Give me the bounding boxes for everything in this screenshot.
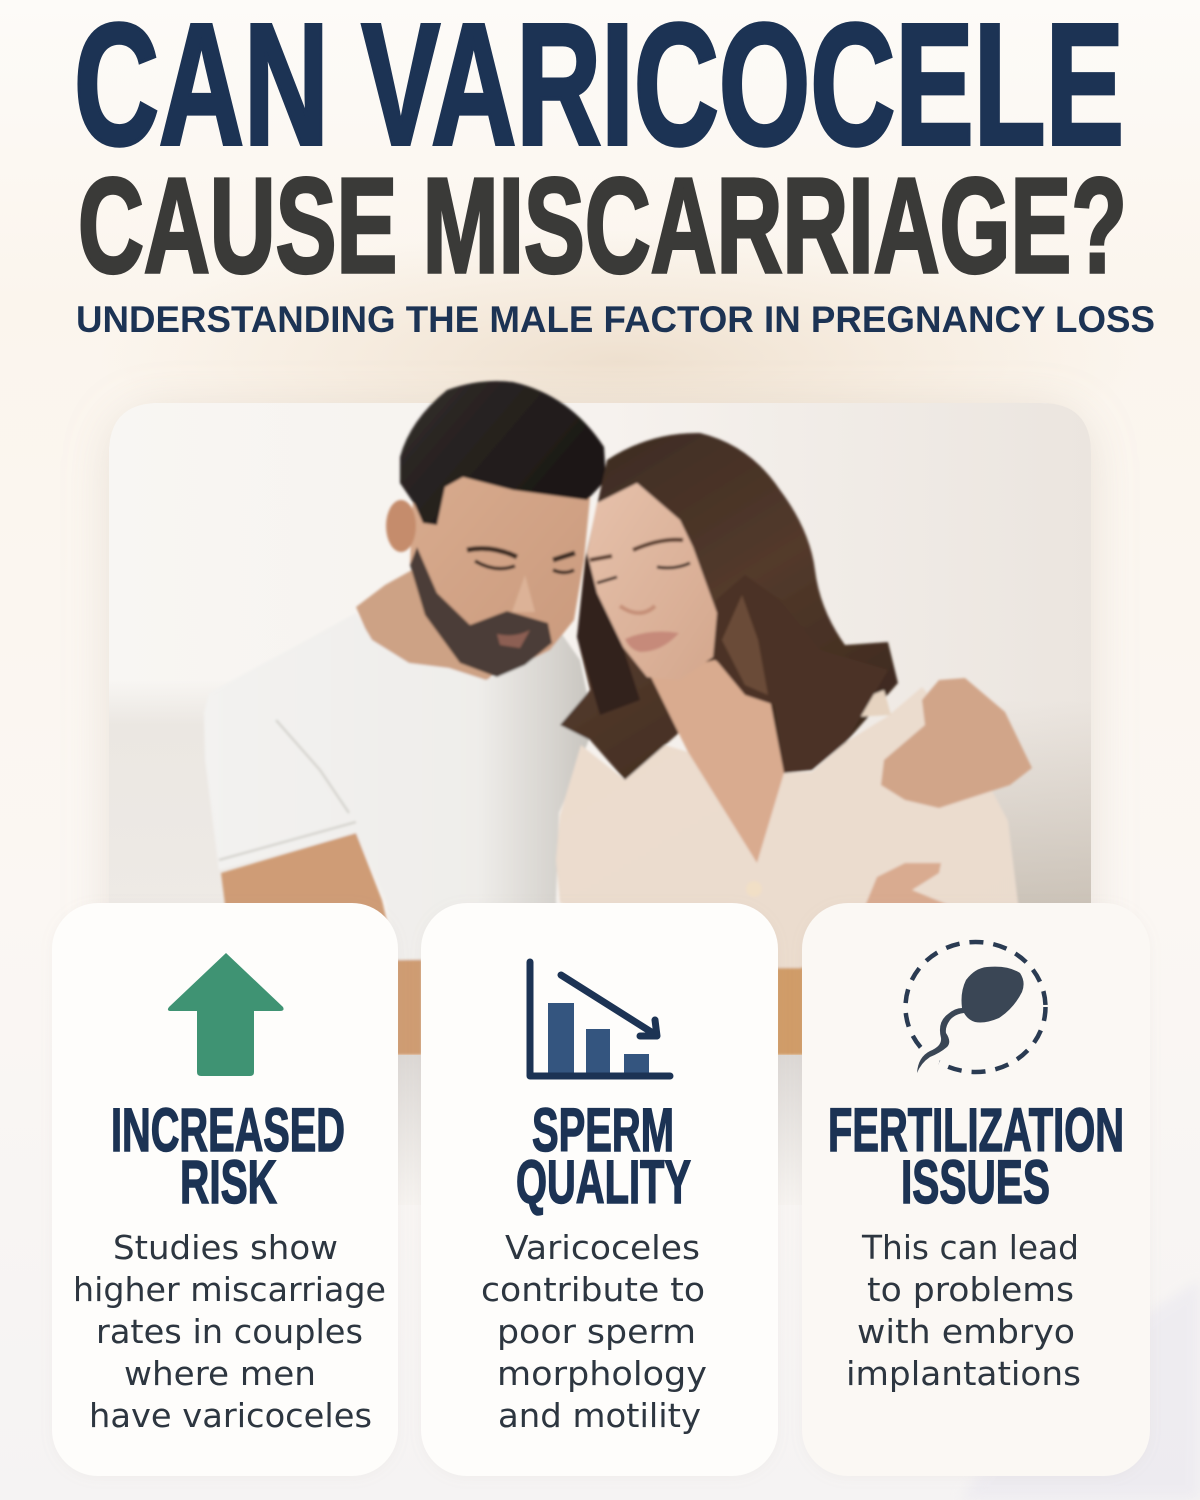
gaps below photo	[398, 1055, 802, 1205]
woman's lips	[625, 631, 679, 652]
woman's features	[590, 540, 683, 560]
text: increased risk body: higher miscarriage	[73, 1270, 386, 1309]
text: sperm quality body: poor sperm	[497, 1312, 696, 1351]
text: increased risk body	[73, 1228, 386, 1435]
text: increased risk body: Studies show	[113, 1228, 338, 1267]
woman's collar	[859, 688, 891, 719]
woman's hand	[865, 862, 946, 903]
man's hair	[400, 381, 606, 525]
man's mouth	[497, 630, 530, 648]
shirt sleeve seam	[219, 720, 356, 860]
man's nose shade	[512, 575, 535, 612]
icon: declining bar chart	[530, 962, 670, 1076]
text: increased risk body: rates in couples	[96, 1312, 363, 1351]
title	[74, 0, 1127, 301]
gap skin: forearms below the shirt	[396, 958, 804, 1055]
text: sperm quality body	[481, 1228, 707, 1435]
woman's hair highlight	[722, 595, 768, 695]
heading: sperm quality: QUALITY	[516, 1148, 691, 1216]
man's neck	[356, 560, 520, 690]
icon: sperm in dashed circle	[906, 942, 1046, 1073]
icon: green up arrow	[168, 953, 284, 1076]
photo panel: couple embracing	[109, 381, 1091, 1055]
man's brows and eyes	[467, 549, 575, 560]
text: fertilization issues body: implantations	[846, 1354, 1081, 1393]
man's hand on shoulder	[881, 678, 1032, 808]
card: increased risk	[52, 903, 398, 1476]
man's beard	[410, 547, 552, 677]
man's shirt	[204, 613, 594, 960]
woman's face	[587, 483, 717, 680]
text: fertilization issues body: to problems	[867, 1270, 1074, 1309]
text: sperm quality body: morphology	[497, 1354, 707, 1393]
text: increased risk body: have varicoceles	[89, 1396, 372, 1435]
text: increased risk body: where men	[124, 1354, 316, 1393]
heading: sperm quality	[516, 1096, 691, 1216]
man's upper arm	[221, 833, 396, 960]
woman's hair right lock	[716, 575, 888, 773]
card: fertilization issues	[802, 903, 1150, 1476]
man's ear	[386, 500, 416, 552]
text: sperm quality body: Varicoceles	[505, 1228, 700, 1267]
heading: fertilization issues: ISSUES	[901, 1148, 1050, 1216]
heading: increased risk	[111, 1096, 345, 1216]
card: sperm quality	[421, 903, 778, 1476]
heading: sperm quality: SPERM	[532, 1096, 674, 1164]
woman's hair	[560, 433, 898, 780]
subtitle: UNDERSTANDING THE MALE FACTOR IN PREGNANCY LOSS	[76, 299, 1155, 340]
woman's hair strand at cheek	[577, 553, 640, 715]
heading: increased risk: INCREASED	[111, 1096, 345, 1164]
woman's neck	[650, 660, 784, 863]
text: fertilization issues body: This can lead	[861, 1228, 1079, 1267]
woman's nose	[620, 606, 655, 613]
heading: fertilization issues	[828, 1096, 1124, 1216]
woman's blouse	[556, 687, 1019, 968]
text: sperm quality body: contribute to	[481, 1270, 705, 1309]
man's face	[410, 470, 590, 677]
text: fertilization issues body: with embryo	[857, 1312, 1075, 1351]
blouse button	[746, 881, 762, 897]
text: sperm quality body: and motility	[498, 1396, 701, 1435]
text: fertilization issues body	[846, 1228, 1081, 1393]
heading: increased risk: RISK	[180, 1148, 277, 1216]
